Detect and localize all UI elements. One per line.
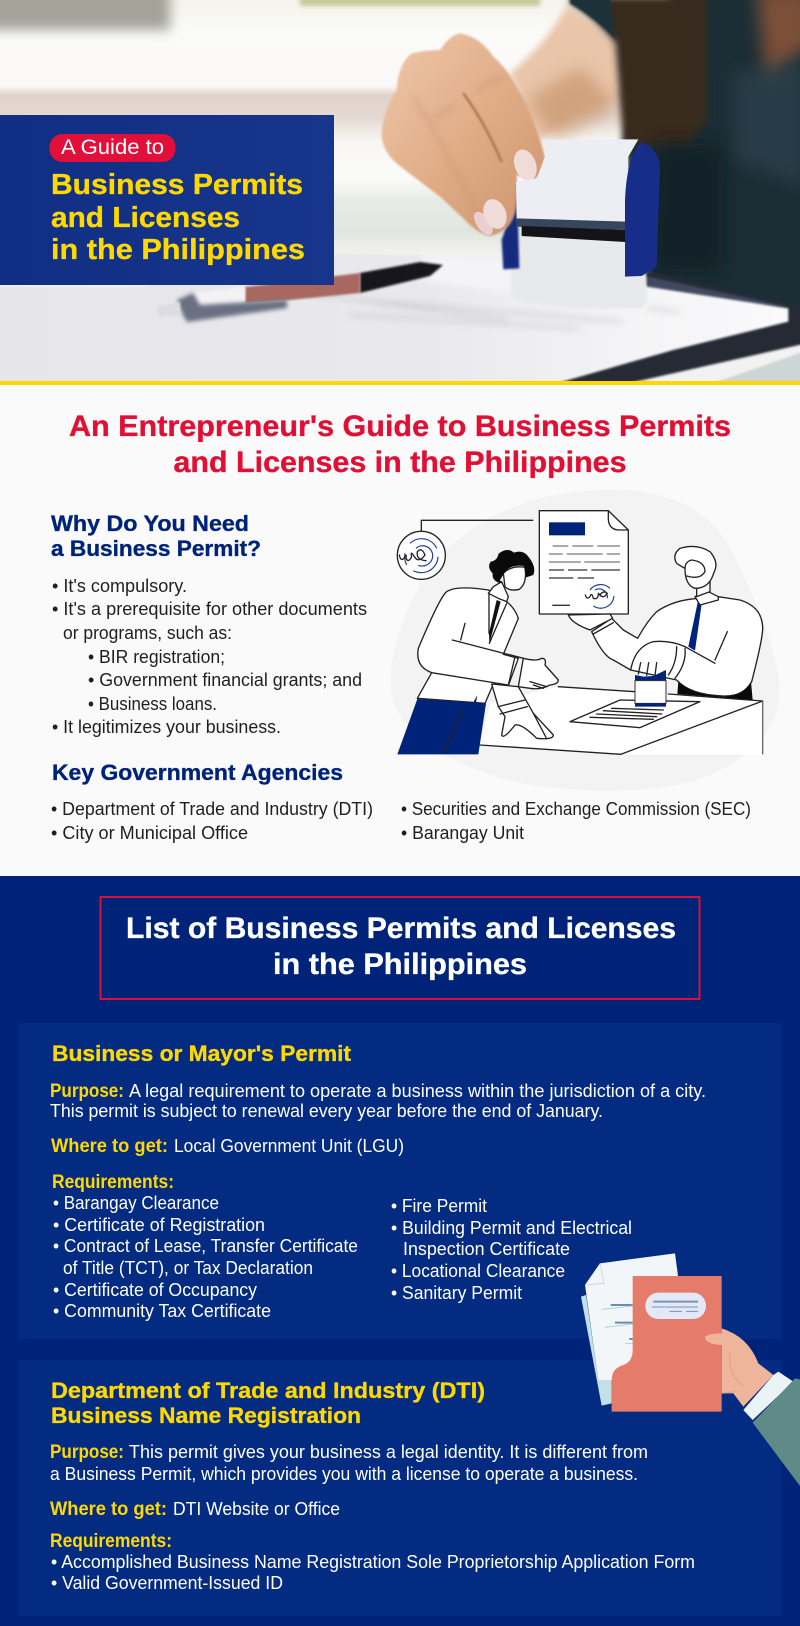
document pages [0,253,788,383]
requirements list: • Valid Government-Issued ID [51,1573,283,1593]
requirements left column: of Title (TCT), or Tax Declaration [63,1258,313,1278]
where to get: Local Government Unit (LGU) [174,1136,404,1156]
stamp blue left side [502,165,519,269]
dark blue section background [0,876,800,1626]
subheading [51,511,261,561]
where to get [50,1499,340,1520]
where to get: Where to get: [50,1499,167,1520]
left man [397,550,558,754]
requirements right column [391,1196,632,1303]
requirements left column: • Certificate of Occupancy [53,1280,257,1300]
yellow divider bar [0,381,800,385]
reasons list: • It's compulsory. [52,576,187,596]
text block: why do you need a business permit [51,511,367,737]
section heading: entrepreneur's guide: An Entrepreneur's Guide to Business Permits [69,410,731,443]
agencies list [51,799,751,843]
subheading: Key Government Agencies [52,760,343,785]
requirements left column: • Certificate of Registration [53,1215,265,1235]
purpose: This permit gives your business a legal identity. It is different from [129,1442,648,1462]
hero headline: and Licenses [51,202,240,234]
panel: DTI business name registration [18,1360,782,1616]
requirements right column: • Locational Clearance [391,1261,565,1281]
text block: key government agencies [51,760,751,843]
hero headline: Business Permits [51,169,303,201]
hero photo: hand stamping a document [0,0,800,390]
list heading box [100,897,700,999]
purpose: Purpose: [50,1081,124,1102]
section heading: entrepreneur's guide [69,410,731,479]
reasons list: • It legitimizes your business. [52,717,281,737]
requirements left column: • Contract of Lease, Transfer Certificate [53,1236,358,1256]
purpose: a Business Permit, which provides you with a license to operate a business. [50,1464,638,1484]
reasons list: • Government financial grants; and [88,670,362,690]
purpose: This permit is subject to renewal every year before the end of January. [50,1101,603,1121]
requirements label: Requirements: [50,1531,172,1552]
binder under the papers [547,272,800,387]
hero title panel [0,115,334,285]
requirements left column: • Community Tax Certificate [53,1301,271,1321]
requirements list [51,1552,695,1593]
purpose: Purpose: [50,1442,124,1463]
list heading box: List of Business Permits and Licenses [126,912,676,945]
agencies list: • City or Municipal Office [51,823,248,843]
agencies list: • Securities and Exchange Commission (SEC) [401,799,751,819]
tag pill [50,134,176,162]
hero headline: in the Philippines [51,234,305,266]
requirements label: Requirements: [52,1172,174,1193]
requirements right column: • Fire Permit [391,1196,487,1216]
forearm [510,7,620,140]
where to get [51,1136,404,1157]
subheading: Why Do You Need [51,511,249,536]
where to get: Where to get: [51,1136,168,1157]
hand [382,33,545,236]
illustration: two businessmen with a stamped document [391,490,779,791]
illustration: hand holding a folder and papers [581,1253,800,1486]
fingernails [474,212,493,235]
purpose: A legal requirement to operate a business within the jurisdiction of a city. [129,1081,706,1101]
requirements left column: • Barangay Clearance [53,1193,219,1213]
requirements list: • Accomplished Business Name Registration Sole Proprietorship Application Form [51,1552,695,1572]
panel heading [51,1378,485,1428]
reasons list: • Business loans. [88,694,217,714]
requirements right column: Inspection Certificate [403,1239,570,1259]
reasons list: or programs, such as: [63,623,232,643]
requirements right column: • Building Permit and Electrical [391,1218,632,1238]
agencies list: • Barangay Unit [401,823,524,843]
self-inking stamp upper body [516,139,638,222]
section heading: entrepreneur's guide: and Licenses in the Philippines [174,446,626,479]
stamp lower body [511,233,647,308]
connector line and seal [397,520,533,579]
list heading box: in the Philippines [273,948,527,981]
reasons list [52,576,367,737]
reasons list: • It's a prerequisite for other documents [52,599,367,619]
panel heading: Department of Trade and Industry (DTI) [51,1378,485,1403]
tag pill: A Guide to [61,136,164,159]
reasons list: • BIR registration; [88,647,225,667]
table and paper [480,687,763,754]
subheading: a Business Permit? [51,536,261,561]
document with stamp [539,511,628,614]
hero headline [51,169,305,266]
where to get: DTI Website or Office [173,1499,340,1519]
right man [568,546,763,707]
panel: business or mayor's permit [18,1023,782,1339]
pen [157,262,443,322]
purpose [50,1442,648,1484]
panel heading: Business or Mayor's Permit [52,1041,352,1066]
agencies list: • Department of Trade and Industry (DTI) [51,799,373,819]
purpose [50,1081,706,1121]
panel heading: Business Name Registration [51,1403,361,1428]
requirements left column [53,1193,358,1321]
woman's dark clothing and hair [623,0,800,327]
requirements right column: • Sanitary Permit [391,1283,522,1303]
